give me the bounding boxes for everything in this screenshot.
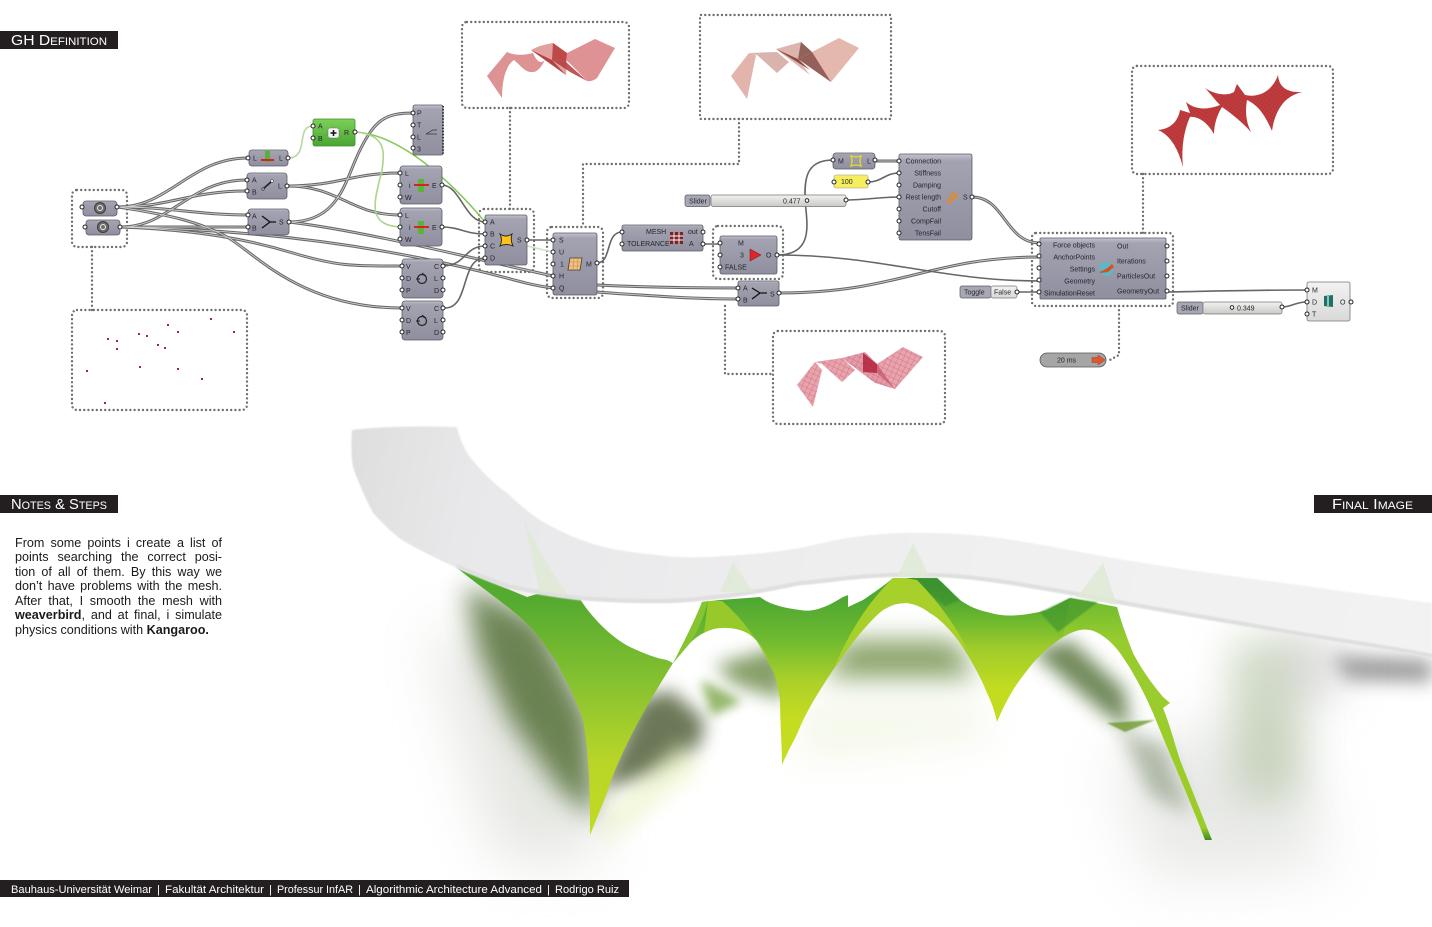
tree output node: P: [417, 110, 422, 118]
spring force node: Connection: [906, 158, 941, 166]
circle node two: [402, 301, 443, 340]
subdivision node: 3: [740, 252, 744, 260]
tree output node: [413, 105, 443, 155]
mesh surface node: Q: [559, 286, 565, 292]
canopy highlights and dark folds: [673, 578, 1098, 693]
number parameter nodes: [83, 201, 120, 235]
notes text block: physics conditions with Kangaroo.: [15, 622, 209, 636]
dotted connectors: [92, 108, 1143, 374]
notes text block: points searching the correct posi-: [15, 550, 222, 564]
single wires: [442, 160, 1307, 308]
tree output node: L: [417, 134, 421, 142]
mesh surface node: [553, 233, 597, 295]
mesh edges node: M: [838, 158, 844, 166]
slider 0.477: 0.477: [783, 198, 801, 205]
toggle False: Toggle: [964, 290, 985, 296]
heading: Final Image: [1314, 495, 1432, 513]
list item node two: L: [405, 213, 409, 220]
yellow panel 100: [834, 175, 868, 188]
kangaroo physics node: Geometry: [1064, 278, 1095, 286]
subdivision node: M: [738, 240, 744, 248]
circle node two: L: [434, 318, 438, 325]
footer credits bar: Fakultät Architektur: [165, 884, 264, 896]
slider 0.477: [685, 195, 846, 206]
kangaroo physics node: Iterations: [1117, 258, 1146, 266]
list item node two: i: [409, 225, 411, 232]
spring force node: Rest length: [906, 194, 941, 202]
list item node two: [400, 208, 442, 246]
grey node wires: [118, 113, 1040, 308]
list item node one: W: [405, 195, 412, 202]
mesh surface node: U: [559, 250, 564, 256]
spring force node: CompFail: [911, 218, 941, 226]
footer credits bar: |: [157, 884, 160, 896]
merge node two: [738, 281, 779, 306]
mesh tolerance node: [622, 225, 703, 251]
list length node: [249, 150, 288, 166]
circle node one: D: [434, 288, 439, 295]
green addition node: [313, 119, 355, 146]
mesh surface node: M: [586, 262, 592, 268]
kangaroo physics node: GeometryOut: [1117, 288, 1159, 296]
subdivision node: [720, 236, 777, 274]
faint support spikes through the band: [523, 517, 1117, 605]
circle node one: P: [406, 288, 411, 295]
canopy green right leg: [1063, 598, 1212, 840]
merge node one: S: [279, 220, 284, 226]
list length node: L: [279, 156, 283, 162]
kangaroo physics node: ParticlesOut: [1117, 274, 1155, 280]
spring force node: TensFail: [915, 230, 941, 238]
slider 0.349: 0.349: [1237, 306, 1255, 312]
notes text block: don’t have problems with the mesh.: [15, 579, 222, 593]
green wires: [288, 126, 553, 252]
notes text block: [15, 536, 222, 636]
spring force node: S: [963, 194, 968, 202]
surface from corners node: S: [517, 238, 522, 244]
white band roof: [351, 426, 1432, 658]
mesh preview: smoothed surface: [487, 39, 615, 98]
heading: Final Image: Final Image: [1332, 496, 1413, 513]
mesh tolerance node: TOLERANCE: [627, 241, 670, 248]
mesh surface node: 1: [560, 262, 564, 268]
spring force node: Stiffness: [914, 170, 941, 178]
mesh tolerance node: out: [688, 229, 698, 236]
notes text block: After that, I smooth the mesh with: [15, 594, 222, 608]
circle node two: V: [406, 306, 411, 313]
line node: L: [278, 184, 282, 190]
circle node one: L: [434, 276, 438, 283]
circle node two: C: [434, 306, 439, 313]
list item node two: W: [405, 237, 412, 244]
line node: B: [252, 190, 257, 196]
subdivision node: FALSE: [725, 264, 747, 272]
kangaroo physics node: Force objects: [1053, 242, 1095, 250]
spring force node: Cutoff: [922, 206, 941, 214]
icons: point spirals: [94, 202, 108, 232]
footer credits bar: Algorithmic Architecture Advanced: [366, 884, 542, 896]
spring force node: Damping: [913, 182, 941, 190]
mesh tolerance node: MESH: [646, 229, 666, 236]
kangaroo physics node: AnchorPoints: [1053, 254, 1095, 262]
point cloud preview: [86, 318, 235, 404]
list item node one: E: [432, 183, 437, 190]
footer credits bar: |: [269, 884, 272, 896]
list item node one: [400, 166, 442, 204]
tree output node: T: [417, 122, 422, 130]
merge node two: A: [743, 286, 748, 292]
merge node one: A: [252, 214, 257, 220]
final image: rendered canopy: [351, 426, 1432, 880]
footer credits bar: |: [547, 884, 550, 896]
footer credits bar: Rodrigo Ruiz: [555, 884, 619, 896]
list length node: L: [253, 156, 257, 162]
green addition node: A: [318, 124, 323, 130]
footer credits bar: Professur InfAR: [277, 884, 353, 896]
heading: GH Definition: GH Definition: [11, 32, 107, 49]
merge node two: S: [770, 292, 775, 298]
canopy green left panel: [457, 568, 673, 835]
green addition node: B: [318, 136, 323, 143]
circle node one: D: [406, 276, 411, 283]
band lower edge shading: [457, 566, 1432, 656]
circle node two: P: [406, 330, 411, 337]
mesh edges node: L: [867, 158, 871, 166]
kangaroo physics node: Settings: [1070, 266, 1095, 274]
subdivision node: O: [766, 252, 772, 260]
surface from corners node: D: [490, 256, 495, 262]
line node: A: [252, 178, 257, 184]
spring force node: [899, 154, 972, 240]
footer credits bar: Bauhaus-Universität Weimar: [11, 884, 152, 896]
merge node one: [248, 209, 289, 235]
line node: [247, 173, 287, 199]
mesh tolerance node: A: [689, 241, 694, 248]
surface from corners node: [485, 215, 527, 265]
slider 0.477: Slider: [689, 198, 708, 205]
surface from corners node: C: [490, 244, 495, 250]
merge node two: B: [743, 298, 748, 304]
canopy green middle panel: [673, 578, 907, 765]
notes text block: tion of all of them. By this way we: [15, 564, 222, 578]
slider 0.349: Slider: [1181, 306, 1200, 312]
mesh preview output node: [1307, 282, 1350, 321]
dotted preview frames: [72, 15, 1333, 424]
notes text block: From some points i create a list of: [15, 536, 222, 550]
connector ports: [80, 111, 1353, 334]
yellow panel 100: 100: [841, 179, 853, 186]
list item node two: E: [432, 225, 437, 232]
circle node one: V: [406, 264, 411, 271]
canopy soft shadows: [430, 585, 1432, 880]
merge node one: B: [252, 226, 257, 232]
slider 0.349: [1177, 302, 1282, 314]
list item node one: i: [409, 183, 411, 190]
notes text block: weaverbird, and at final, i simulate: [15, 608, 222, 622]
green addition node: R: [344, 130, 349, 137]
timer 20 ms: [1040, 353, 1106, 367]
mesh preview: relaxed tensile form: [1158, 75, 1303, 167]
heading: Notes & Steps: Notes & Steps: [11, 496, 107, 513]
toggle False: [960, 286, 1017, 298]
mesh surface node: H: [559, 274, 564, 280]
kangaroo physics node: SimulationReset: [1044, 290, 1095, 298]
circle node two: D: [406, 318, 411, 325]
surface from corners node: A: [490, 220, 495, 226]
list item node one: L: [405, 171, 409, 178]
timer 20 ms: 20 ms: [1057, 358, 1077, 364]
toggle False: False: [994, 290, 1011, 296]
mesh preview: subdivided surface: [797, 347, 923, 407]
mesh preview output node: T: [1312, 312, 1317, 318]
tree output node: 3: [417, 146, 421, 154]
kangaroo physics node: [1040, 238, 1166, 299]
kangaroo physics node: Out: [1117, 244, 1128, 250]
circle node one: [402, 259, 443, 298]
footer credits bar: |: [358, 884, 361, 896]
surface from corners node: B: [490, 232, 495, 238]
circle node one: C: [434, 264, 439, 271]
mesh preview output node: M: [1312, 288, 1318, 294]
mesh surface node: S: [559, 238, 564, 244]
canopy green right panel: [893, 578, 1090, 722]
mesh preview output node: O: [1340, 300, 1346, 306]
mesh preview output node: D: [1312, 300, 1317, 306]
circle node two: D: [434, 330, 439, 337]
mesh edges node: [833, 153, 875, 169]
mesh preview: faceted surface: [731, 38, 859, 99]
footer credits bar: [0, 880, 629, 897]
